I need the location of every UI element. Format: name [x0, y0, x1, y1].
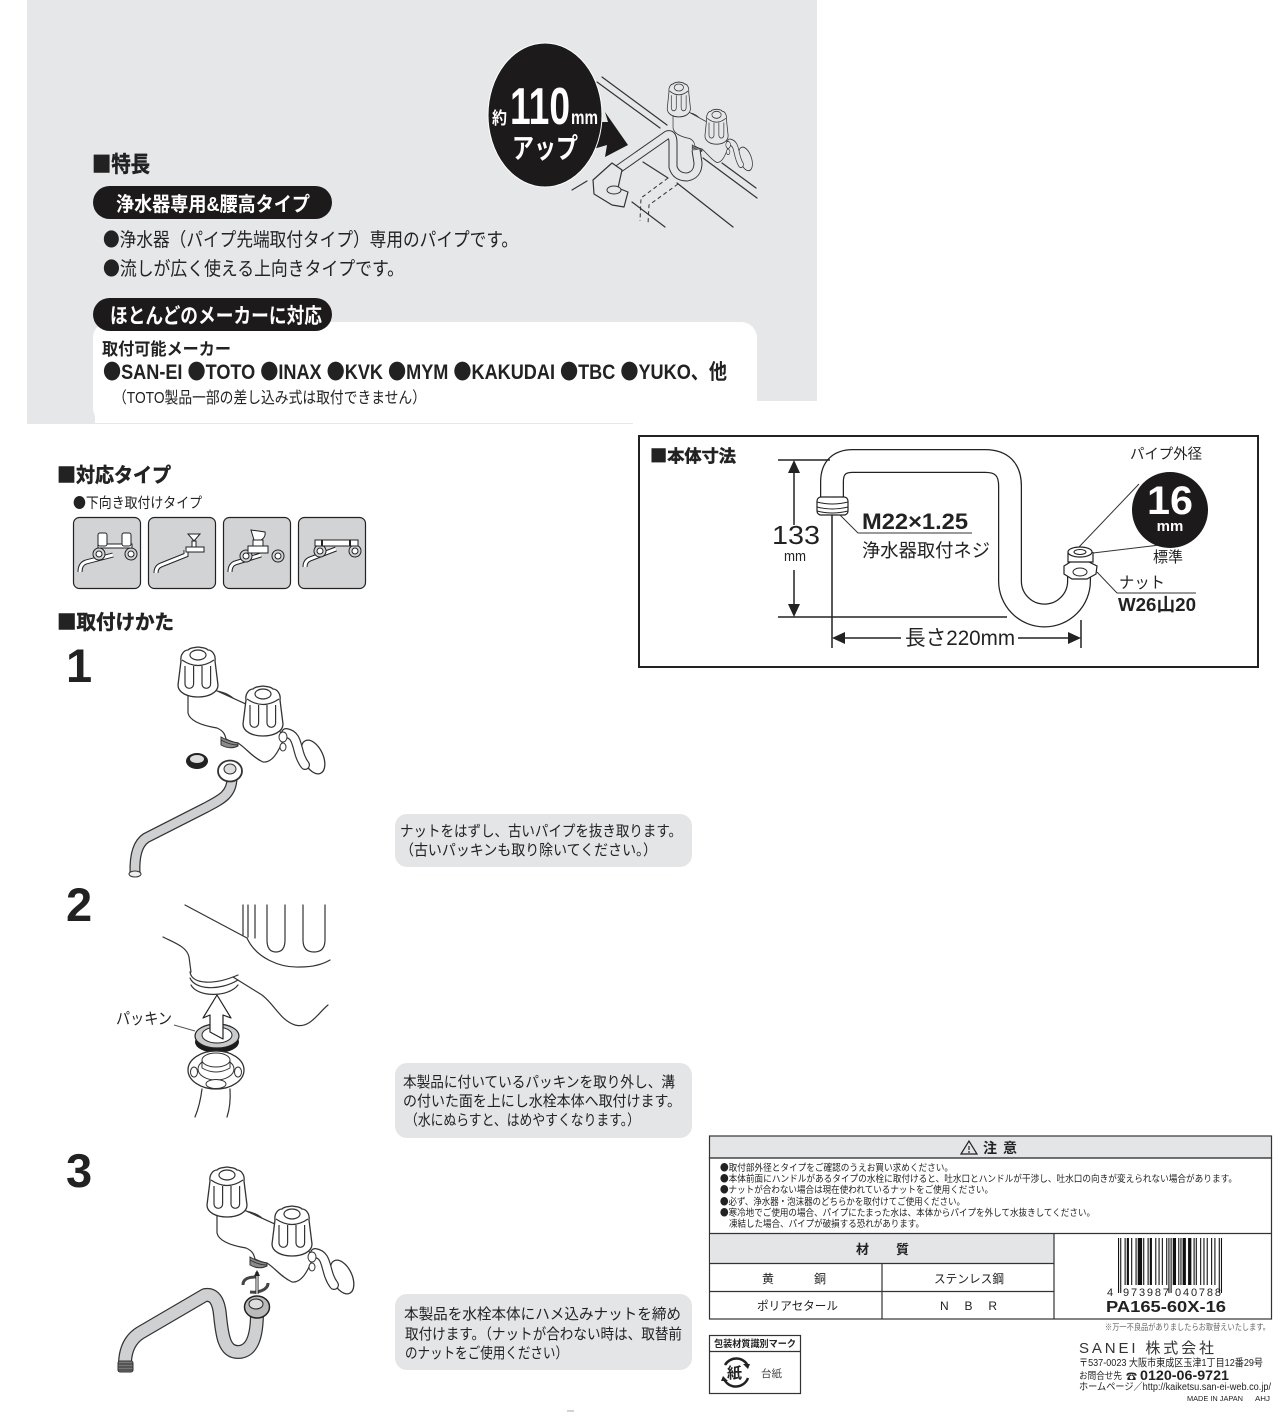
- label: nut size: W26山20: [1118, 595, 1196, 615]
- label: nut size: [1097, 572, 1196, 615]
- badge: for water purifiers and high type: 浄水器専用&腰高タイプ: [116, 193, 310, 216]
- text block: compatible makers: （TOTO製品一部の差し込み式は取付できません）: [113, 389, 426, 407]
- label: thread size: M22×1.25: [862, 509, 968, 534]
- callout: about 110mm up: mm: [571, 108, 598, 129]
- table: materials: [709, 1158, 1272, 1319]
- instruction: step 2: 本製品に付いているパッキンを取り外し、溝: [403, 1074, 675, 1091]
- text block: feature bullets: ●浄水器（パイプ先端取付タイプ）専用のパイプです。: [103, 225, 518, 252]
- callout: pipe outer diameter 16mm: パイプ外径: [1130, 446, 1202, 463]
- barcode: PA165-60X-16: [1106, 1299, 1226, 1316]
- callout: about 110mm up: [488, 43, 628, 187]
- table: materials: 銅: [814, 1272, 826, 1286]
- instruction: step 1: （古いパッキンも取り除いてください。）: [400, 842, 657, 859]
- barcode: 040788: [1175, 1287, 1221, 1299]
- panel: packaging material mark: [709, 1336, 800, 1394]
- heading: caution: 注意: [983, 1140, 1017, 1156]
- heading: features: ■特長: [92, 147, 150, 179]
- panel: packaging material mark: 包装材質識別マーク: [714, 1338, 796, 1350]
- callout: pipe outer diameter 16mm: 16: [1147, 479, 1193, 523]
- callout: about 110mm up: 110: [510, 78, 570, 136]
- label: thread size: [840, 509, 990, 561]
- label: downward mount type: ●下向き取付けタイプ: [73, 492, 202, 513]
- heading: body dimensions: ■本体寸法: [650, 442, 736, 467]
- icon: single tap: [148, 518, 216, 588]
- company details: SANEI: 0120-06-9721: [1140, 1367, 1229, 1383]
- dimension: height 133mm: mm: [784, 548, 806, 565]
- company details: SANEI: お問合せ先: [1079, 1370, 1122, 1382]
- label: thread size: 浄水器取付ネジ: [862, 540, 990, 561]
- icon: paper recycling mark: 紙: [727, 1364, 742, 1382]
- callout: pipe outer diameter 16mm: 標準: [1153, 549, 1183, 566]
- heading: compatible types: ■対応タイプ: [57, 459, 171, 488]
- instruction: step 3: のナットをご使用ください）: [405, 1345, 568, 1362]
- badge: compatible with most makers: [93, 298, 332, 331]
- dimension: length 220mm: [832, 515, 1081, 650]
- instruction: step 3: 取付けます。（ナットが合わない時は、取替前: [405, 1326, 682, 1343]
- text block: caution list: 凍結した場合、パイプが破損する恐れがあります。: [729, 1216, 924, 1230]
- barcode: 4: [1107, 1287, 1113, 1299]
- company details: SANEI: AHJ: [1255, 1396, 1270, 1403]
- panel: body dimensions: [639, 436, 1258, 667]
- callout: about 110mm up: アップ: [512, 133, 578, 164]
- instruction: step 3: 本製品を水栓本体にハメ込みナットを締め: [404, 1306, 681, 1323]
- instruction: step 2: の付いた面を上にし水栓本体へ取付けます。: [403, 1093, 681, 1110]
- dimension: height 133mm: 133: [772, 520, 820, 550]
- step number 3: 3: [66, 1144, 92, 1197]
- text block: caution list: ●取付部外径とタイプをご確認のうえお買い求めください。: [720, 1160, 953, 1174]
- instruction: step 1: ナットをはずし、古いパイプを抜き取ります。: [400, 823, 682, 840]
- text block: caution list: [720, 1160, 1237, 1230]
- text block: caution list: ●寒冷地でご使用の場合、パイプにたまった水は、本体からパイプを外して水抜きしてください。: [720, 1205, 1095, 1219]
- panel: cautions: [710, 1136, 1272, 1230]
- heading: how to install: ■取付けかた: [57, 606, 174, 635]
- company details: SANEI: [1079, 1340, 1271, 1403]
- table: materials: 質: [896, 1242, 909, 1257]
- table: materials: NBR: [940, 1299, 997, 1313]
- text block: caution list: ●ナットが合わない場合は現在使われているナットをご使用ください。: [720, 1182, 993, 1196]
- icon: single-lever faucet: [224, 518, 290, 588]
- icon: two-handle faucet: [74, 518, 140, 588]
- text block: feature bullets: ●流しが広く使える上向きタイプです。: [103, 254, 404, 281]
- barcode: [1106, 1238, 1226, 1316]
- text block: caution list: ●必ず、浄水器・泡沫器のどちらかを取付けてご使用ください。: [720, 1194, 965, 1208]
- badge: compatible with most makers: ほとんどのメーカーに対応: [110, 305, 322, 328]
- company details: SANEI: SANEI 株式会社: [1079, 1340, 1214, 1357]
- illustration: faucet with raised pipe: [572, 77, 757, 227]
- text block: compatible makers: 取付可能メーカー: [102, 339, 231, 359]
- company details: SANEI: ☎: [1126, 1371, 1137, 1383]
- icon: warning triangle: [961, 1141, 977, 1154]
- label: packing: [116, 1011, 195, 1031]
- illustration: remove old pipe: [129, 647, 330, 877]
- label: packing: パッキン: [116, 1011, 172, 1028]
- callout: pipe outer diameter 16mm: [1079, 446, 1208, 566]
- label: nut size: ナット: [1119, 575, 1165, 592]
- table: materials: 材: [856, 1242, 869, 1257]
- panel: features background: [27, 0, 817, 424]
- text block: feature bullets: [103, 225, 518, 281]
- instruction: step 1: [395, 814, 692, 867]
- company details: SANEI: MADE IN JAPAN: [1187, 1396, 1243, 1403]
- barcode: 973987: [1123, 1287, 1169, 1299]
- text block: caution list: ●本体前面にハンドルがあるタイプの水栓に取付けると、吐水口とハンドルが干渉し、吐水口の向きが変えられない場合があります。: [720, 1171, 1237, 1185]
- illustration: fit the packing: [163, 905, 330, 1117]
- dimension: height 133mm: [772, 460, 1007, 617]
- callout: pipe outer diameter 16mm: mm: [1157, 518, 1183, 535]
- illustration: attach new pipe: [118, 1167, 359, 1372]
- instruction: step 3: [395, 1294, 692, 1370]
- table: materials: ポリアセタール: [757, 1299, 838, 1313]
- callout: about 110mm up: 約: [492, 109, 507, 128]
- text block: compatible makers: [102, 339, 727, 407]
- table: materials: ステンレス鋼: [934, 1272, 1004, 1286]
- dimension: length 220mm: 長さ220mm: [905, 627, 1015, 650]
- panel: packaging material mark: 台紙: [761, 1367, 782, 1380]
- table: materials: 黄: [762, 1272, 774, 1286]
- step number 2: 2: [66, 878, 92, 931]
- text block: compatible makers: ●SAN-EI ●TOTO ●INAX ●KVK ●MYM ●KAKUDAI ●TBC ●YUKO、他: [103, 356, 727, 386]
- diagram: pipe: [817, 461, 1097, 616]
- instruction: step 2: （水にぬらすと、はめやすくなります。）: [405, 1112, 640, 1129]
- badge: for water purifiers and high type: [93, 186, 332, 219]
- instruction: step 2: [395, 1063, 692, 1138]
- icon: thermostatic bar faucet: [298, 518, 366, 588]
- step number 1: 1: [66, 639, 92, 692]
